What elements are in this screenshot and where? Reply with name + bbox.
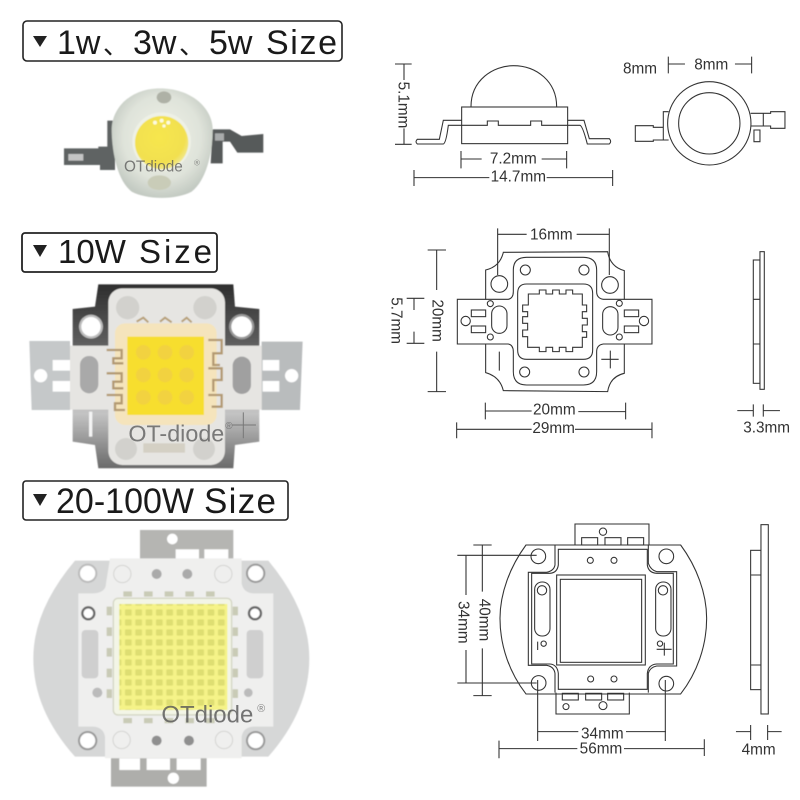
dimension labels: 5.7mm — [388, 297, 405, 344]
heading: 10W size — [22, 233, 217, 272]
watermark: ® — [225, 421, 233, 432]
heading: 1w 3w 5w size: 、 — [179, 30, 205, 60]
watermark: ® — [257, 703, 265, 715]
watermark: OTdiode — [161, 702, 253, 729]
watermark: OTdiode — [124, 159, 183, 176]
watermark — [128, 412, 256, 447]
photo: 20-100W LED — [33, 530, 309, 787]
heading: 1w 3w 5w size: 、 — [103, 30, 129, 60]
dimension labels: 8mm — [623, 60, 657, 77]
heading: 10W size: Size — [139, 233, 212, 270]
diagram: 20-100W views — [455, 524, 782, 758]
photo: 10W LED — [29, 284, 303, 468]
watermark: OT-diode — [128, 421, 224, 447]
heading: 1w 3w 5w size: 3w — [133, 24, 177, 62]
dimension labels: 29mm — [532, 420, 575, 437]
dimension labels: 16mm — [530, 226, 573, 243]
heading: 1w 3w 5w size: 5w — [209, 24, 253, 62]
dimension labels: 34mm — [581, 725, 624, 742]
dimension labels: 20mm — [428, 299, 445, 342]
dimension labels: 7.2mm — [490, 150, 537, 167]
diagram: 1-5W side and top views — [395, 56, 785, 186]
dimension labels: 20mm — [533, 402, 576, 419]
heading: 1w 3w 5w size: Size — [266, 24, 337, 62]
watermark: ® — [194, 159, 200, 168]
diagram: 10W views — [388, 226, 790, 438]
heading: 20-100W size — [23, 481, 288, 521]
dimension labels: 14.7mm — [491, 169, 546, 186]
dimension labels: 4mm — [742, 741, 776, 758]
dimension labels: 5.1mm — [395, 82, 412, 128]
dimension labels: 8mm — [694, 56, 728, 73]
heading: 20-100W size: Size — [204, 482, 276, 521]
dimension labels: 40mm — [475, 599, 492, 641]
dimension labels: 56mm — [580, 740, 622, 757]
photo: 1-5W LED — [64, 88, 263, 198]
dimension labels: 3.3mm — [743, 420, 790, 437]
heading: 20-100W size: 20-100W — [56, 482, 194, 521]
heading: 1w 3w 5w size — [23, 21, 342, 62]
heading: 10W size: 10W — [58, 233, 127, 270]
dimension labels — [395, 56, 728, 186]
dimension labels — [388, 226, 790, 437]
heading: 1w 3w 5w size: 1w — [57, 24, 101, 62]
dimension labels — [455, 599, 776, 758]
dimension labels: 34mm — [455, 601, 472, 644]
